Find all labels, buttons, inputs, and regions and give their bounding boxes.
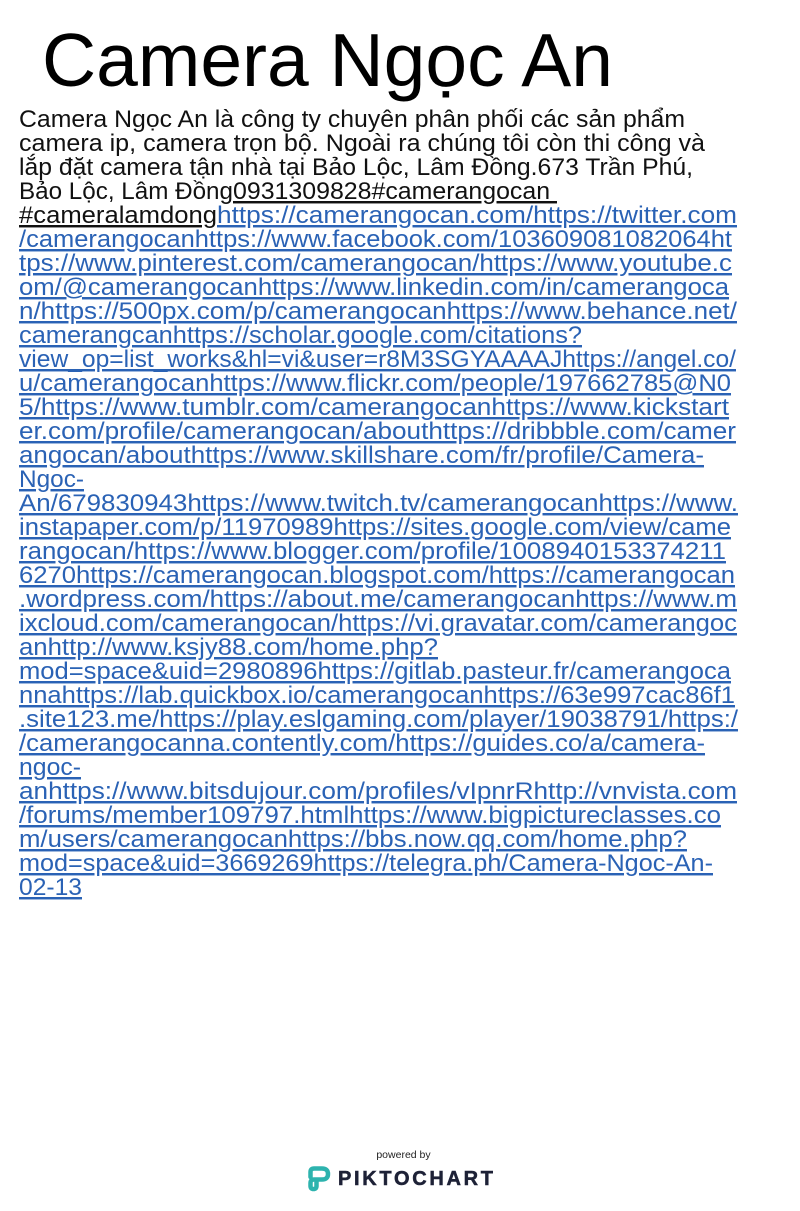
text block: list of links: u/camerangocanhttps://www.flickr.com/people/197662785@N0 [19, 370, 731, 397]
text block: list of links: n/https://500px.com/p/camerangocanhttps://www.behance.net/ [19, 298, 737, 325]
icon: Piktochart logo [310, 1168, 328, 1189]
text block: list of links: rangocan/https://www.blogger.com/profile/1008940153374211 [19, 538, 726, 565]
text block: list of links: mod=space&uid=3669269https://telegra.ph/Camera-Ngoc-An- [19, 850, 713, 877]
text block: company description and contact details [19, 106, 705, 229]
text block: list of links: nnahttps://lab.quickbox.io/camerangocanhttps://63e997cac86f1 [19, 682, 735, 709]
powered by label: powered by [376, 1149, 431, 1161]
text block: list of links: angocan/abouthttps://www.skillshare.com/fr/profile/Camera- [19, 442, 704, 469]
text block: list of links: anhttps://www.bitsdujour.com/profiles/vIpnrRhttp://vnvista.com [19, 778, 737, 805]
text block: list of links: anhttp://www.ksjy88.com/home.php? [19, 634, 438, 661]
text block: list of links: 5/https://www.tumblr.com/camerangocanhttps://www.kickstart [19, 394, 729, 421]
wordmark: PIKTOCHART [338, 1168, 493, 1190]
text block: company description and contact details: lắp đặt camera tận nhà tại Bảo Lộc, Lâm Đồng.673 Trần Phú, [19, 154, 693, 181]
text block: company description and contact details: #cameralamdong [19, 202, 217, 229]
text block: list of links: ixcloud.com/camerangocan/https://vi.gravatar.com/camerangoc [19, 610, 737, 637]
text block: company description and contact details: Camera Ngọc An là công ty chuyên phân phối các sản phẩm [19, 106, 685, 133]
title: Camera Ngọc An [42, 18, 613, 102]
text block: list of links: Ngoc- [19, 466, 84, 493]
text block: list of links [19, 202, 738, 901]
footer: powered by Piktochart [310, 1149, 493, 1190]
text block: list of links: mod=space&uid=2980896https://gitlab.pasteur.fr/camerangoca [19, 658, 731, 685]
text block: list of links: instapaper.com/p/11970989https://sites.google.com/view/came [19, 514, 731, 541]
text block: list of links: /forums/member109797.htmlhttps://www.bigpictureclasses.co [19, 802, 721, 829]
text block: company description and contact details: camera ip, camera trọn bộ. Ngoài ra chúng tôi còn thi công và [19, 130, 705, 157]
text block: list of links: /camerangocanna.contently.com/https://guides.co/a/camera- [19, 730, 705, 757]
text block: list of links: /camerangocanhttps://www.facebook.com/103609081082064ht [19, 226, 732, 253]
text block: list of links: https://camerangocan.com/https://twitter.com [217, 202, 737, 229]
text block: list of links: view_op=list_works&hl=vi&user=r8M3SGYAAAAJhttps://angel.co/ [19, 346, 736, 373]
text block: list of links: 6270https://camerangocan.blogspot.com/https://camerangocan [19, 562, 735, 589]
text block: list of links: tps://www.pinterest.com/camerangocan/https://www.youtube.c [19, 250, 732, 277]
text block: list of links: An/679830943https://www.twitch.tv/camerangocanhttps://www. [19, 490, 738, 517]
text block: list of links: .wordpress.com/https://about.me/camerangocanhttps://www.m [19, 586, 737, 613]
text block: list of links: om/@camerangocanhttps://www.linkedin.com/in/camerangoca [19, 274, 729, 301]
text block: company description and contact details: 0931309828#camerangocan [233, 178, 557, 205]
text block: list of links: m/users/camerangocanhttps://bbs.now.qq.com/home.php? [19, 826, 687, 853]
text block: list of links: .site123.me/https://play.eslgaming.com/player/19038791/https:/ [19, 706, 738, 733]
text block: list of links: 02-13 [19, 874, 82, 901]
text block: list of links: camerangcanhttps://scholar.google.com/citations? [19, 322, 582, 349]
text block: company description and contact details: Bảo Lộc, Lâm Đồng [19, 178, 233, 205]
text block: list of links: ngoc- [19, 754, 81, 781]
text block: list of links: er.com/profile/camerangocan/abouthttps://dribbble.com/camer [19, 418, 736, 445]
